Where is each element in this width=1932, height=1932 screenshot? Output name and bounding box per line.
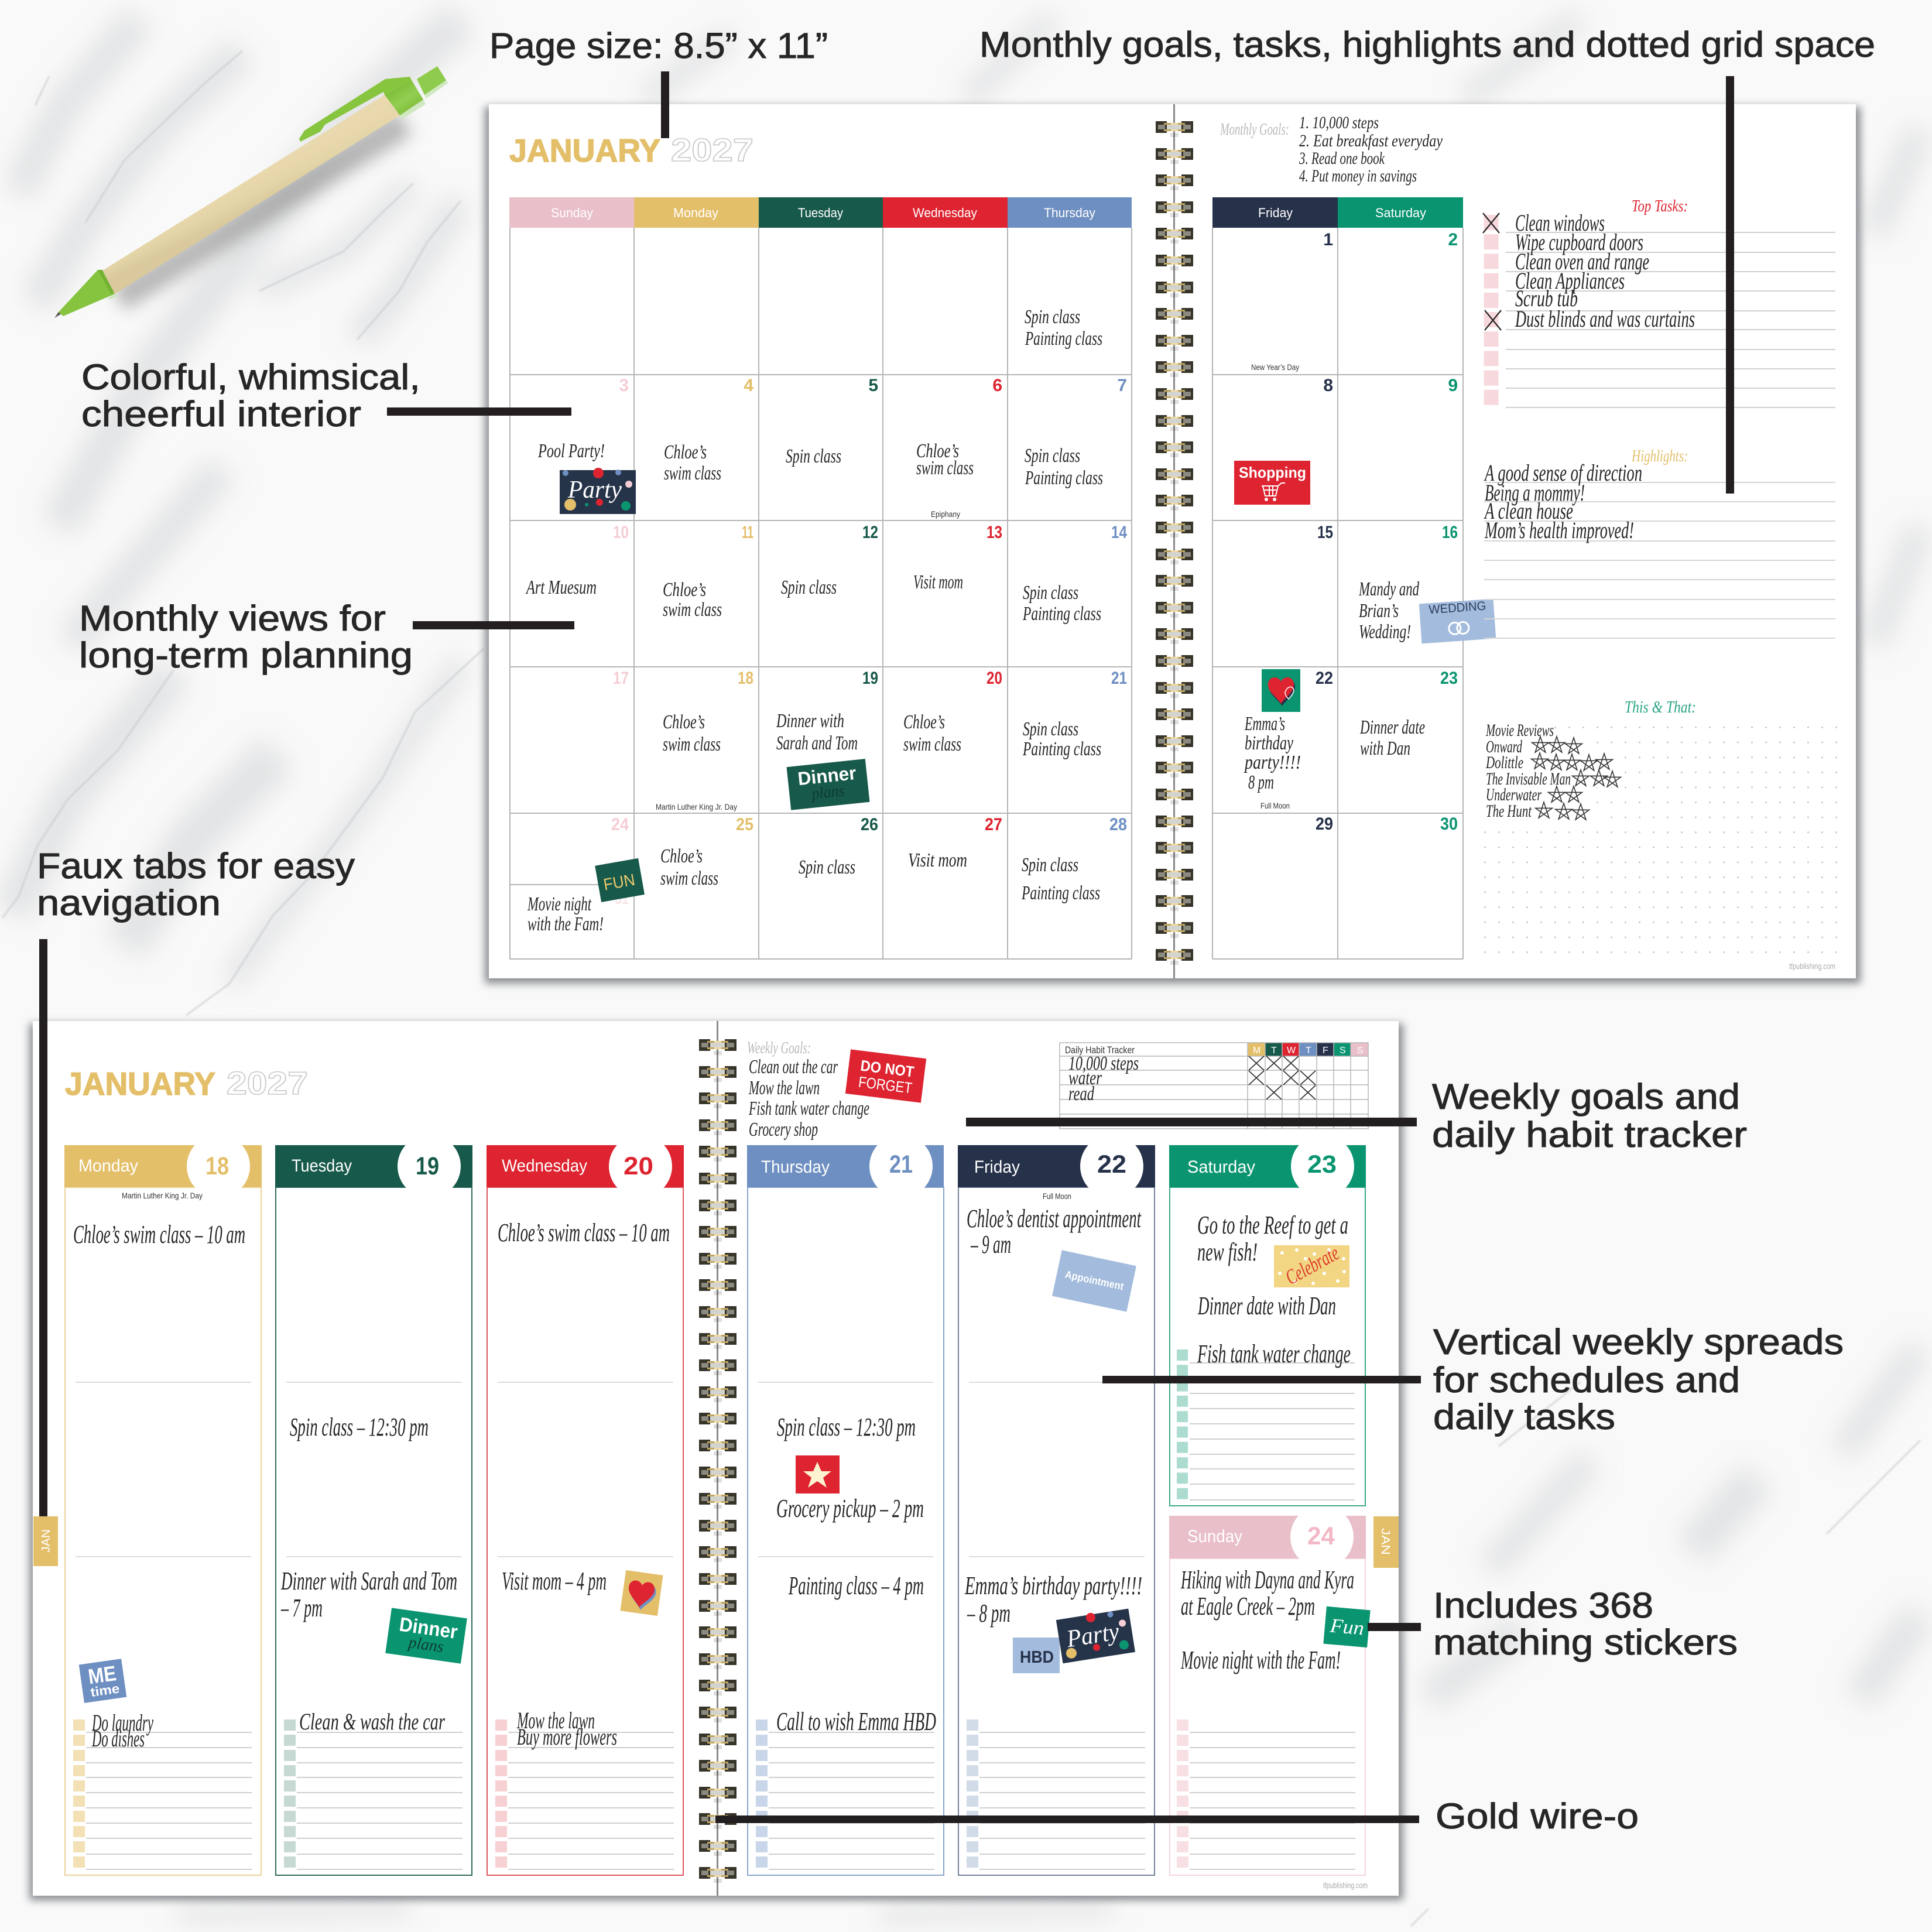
sticker: appointment: Appointment — [1064, 1269, 1125, 1292]
calendar date numbers: 23 — [1440, 669, 1458, 688]
day column: Saturday: new fish! — [1197, 1238, 1258, 1266]
gold wire-o binding, monthly spread — [1156, 121, 1193, 965]
calendar weekday headers: Saturday — [1375, 205, 1426, 220]
sticker: party: Party — [567, 477, 622, 503]
daily habit tracker: W — [1287, 1046, 1296, 1056]
sticker: dinner plans: Dinner — [797, 762, 857, 789]
top tasks list — [1483, 197, 1835, 408]
calendar handwritten entries: Painting class — [1022, 603, 1101, 625]
calendar date numbers: 21 — [1111, 669, 1127, 688]
calendar handwritten entries — [526, 306, 1425, 935]
daily habit tracker: water — [1068, 1067, 1102, 1089]
daily habit tracker: T — [1271, 1046, 1277, 1056]
month title — [509, 132, 753, 169]
sticker: me time: time — [90, 1681, 121, 1700]
highlights list: A good sense of direction — [1484, 460, 1642, 486]
calendar handwritten entries: birthday — [1245, 732, 1294, 754]
calendar handwritten entries: Spin class — [1025, 445, 1080, 467]
top tasks list: Clean Appliances — [1515, 268, 1625, 294]
calendar handwritten entries: Chloe’s — [663, 579, 706, 601]
highlights list: Highlights: — [1631, 447, 1688, 465]
calendar date numbers: 14 — [1111, 523, 1127, 542]
sticker: HBD — [1013, 1638, 1060, 1673]
calendar handwritten entries: Chloe’s — [663, 711, 705, 733]
day column: Sunday: Hiking with Dayna and Kyra — [1180, 1566, 1354, 1594]
daily habit tracker: S — [1357, 1046, 1364, 1056]
callout: matching stickers: Includes 368 — [1433, 1585, 1653, 1625]
sticker: do not forget: FORGET — [858, 1073, 913, 1097]
day column: Monday: Martin Luther King Jr. Day — [122, 1191, 203, 1200]
spine line — [717, 1021, 718, 1896]
daily habit tracker — [1060, 1043, 1368, 1129]
calendar handwritten entries: Dinner date — [1359, 717, 1425, 738]
sticker: wedding: WEDDING — [1429, 600, 1486, 616]
calendar date numbers: 8 — [1323, 376, 1333, 395]
sticker: party — [1056, 1607, 1135, 1663]
callout: faux tabs — [37, 846, 355, 1516]
callout: matching stickers: matching stickers — [1433, 1622, 1738, 1662]
calendar weekday headers: Sunday — [551, 205, 593, 220]
calendar handwritten entries: Chloe’s — [903, 711, 945, 733]
calendar weekday headers: Tuesday — [798, 205, 843, 220]
day column: Tuesday: Dinner with Sarah and Tom — [280, 1567, 457, 1595]
dotted grid: this and that — [1484, 698, 1838, 954]
callout: vertical weekly spreads: for schedules and — [1433, 1360, 1740, 1400]
top tasks list: Wipe cupboard doors — [1515, 229, 1643, 255]
calendar date numbers — [611, 230, 1458, 908]
calendar date numbers: 24 — [611, 815, 629, 834]
day column: Thursday: Painting class – 4 pm — [788, 1571, 924, 1600]
calendar handwritten entries: Wedding! — [1359, 621, 1411, 643]
calendar handwritten entries: Spin class — [781, 577, 837, 598]
callout: page size — [489, 26, 828, 138]
calendar handwritten entries: Sarah and Tom — [776, 732, 858, 754]
daily habit tracker: S — [1340, 1046, 1346, 1056]
dotted grid: this and that: Movie Reviews — [1485, 721, 1554, 740]
top tasks list: Clean oven and range — [1515, 248, 1649, 275]
calendar date numbers: 11 — [742, 523, 753, 542]
calendar handwritten entries: Spin class — [1023, 718, 1078, 740]
spine line — [1173, 104, 1175, 978]
day column: Monday: 18 — [205, 1152, 229, 1180]
top tasks list: Clean windows — [1515, 210, 1605, 236]
calendar handwritten entries: Visit mom — [908, 849, 967, 871]
calendar holiday captions: New Year’s Day — [1251, 362, 1299, 372]
day column: Monday: Do laundry — [91, 1710, 153, 1736]
day column: Monday: Chloe’s swim class – 10 am — [73, 1220, 245, 1249]
day column: Saturday: Fish tank water change — [1197, 1340, 1351, 1368]
calendar handwritten entries: Chloe’s — [664, 441, 707, 463]
highlights list: Being a mommy! — [1485, 479, 1585, 506]
weekly goals — [747, 1039, 869, 1140]
day column: Wednesday: Wednesday — [502, 1156, 587, 1176]
calendar handwritten entries: Pool Party! — [537, 440, 605, 462]
calendar handwritten entries: swim class — [663, 734, 721, 755]
day column: Friday: Friday — [974, 1157, 1020, 1177]
daily habit tracker: M — [1253, 1046, 1260, 1056]
highlights list: A clean house — [1484, 498, 1573, 524]
calendar date numbers: 27 — [985, 815, 1002, 834]
calendar date numbers: 7 — [1117, 376, 1127, 395]
faux tab: left JAN: JAN — [40, 1529, 53, 1553]
sticker: appointment — [1052, 1250, 1136, 1312]
calendar date numbers: 6 — [992, 376, 1002, 395]
calendar handwritten entries: Art Muesum — [526, 577, 597, 598]
calendar date numbers: 31 — [615, 889, 629, 908]
sticker: heart — [1262, 669, 1300, 712]
day column: Friday: – 8 pm — [967, 1599, 1010, 1628]
daily habit tracker: Daily Habit Tracker — [1065, 1044, 1135, 1056]
calendar holiday captions: Epiphany — [931, 509, 960, 519]
calendar date numbers: 9 — [1448, 376, 1458, 395]
calendar weekday headers — [509, 197, 1463, 228]
day column: Thursday — [747, 1135, 944, 1875]
dotted grid: this and that: Onward — [1486, 737, 1523, 756]
sticker: fun: Fun — [1328, 1615, 1365, 1639]
day column: Wednesday: Mow the lawn — [516, 1707, 595, 1734]
day column: Tuesday: Clean & wash the car — [299, 1708, 445, 1735]
sticker: shopping — [1234, 461, 1310, 505]
monthly goals — [1220, 113, 1443, 186]
sticker: me time — [79, 1659, 126, 1703]
callout: monthly views: long-term planning — [79, 635, 413, 675]
sticker: fun — [1323, 1606, 1371, 1647]
month title: 2027 — [671, 132, 753, 168]
calendar date numbers: 22 — [1316, 669, 1333, 688]
calendar handwritten entries: Spin class — [1022, 854, 1078, 876]
monthly goals: 1. 10,000 steps — [1299, 113, 1379, 132]
top tasks list: Dust blinds and was curtains — [1515, 306, 1695, 332]
daily habit tracker: T — [1306, 1046, 1311, 1056]
callout: colorful interior: Colorful, whimsical, — [81, 357, 420, 397]
weekly goals: Weekly Goals: — [747, 1039, 811, 1057]
calendar date numbers: 12 — [862, 523, 878, 542]
calendar handwritten entries: Visit mom — [913, 571, 963, 593]
calendar handwritten entries: Chloe’s — [916, 440, 959, 462]
day column: Wednesday: Buy more flowers — [517, 1724, 617, 1750]
day column: Tuesday: – 7 pm — [280, 1594, 323, 1622]
calendar handwritten entries: Spin class — [1025, 306, 1080, 328]
dotted grid: this and that: This & That: — [1625, 698, 1696, 717]
calendar handwritten entries: with Dan — [1360, 738, 1410, 759]
sticker: shopping: Shopping — [1239, 464, 1306, 481]
top tasks list: Scrub tub — [1515, 285, 1578, 311]
calendar date numbers: 19 — [862, 669, 878, 688]
faux tab: right JAN: JAN — [1379, 1528, 1392, 1555]
day column: Thursday: Thursday — [761, 1157, 830, 1177]
callout: gold wire-o — [715, 1796, 1639, 1836]
sticker: me time: ME — [87, 1661, 118, 1688]
calendar handwritten entries: Spin class — [1023, 582, 1078, 604]
day column: Saturday: Dinner date with Dan — [1197, 1292, 1336, 1320]
day column: Sunday: at Eagle Creek – 2pm — [1181, 1592, 1315, 1621]
calendar handwritten entries: Spin class — [786, 446, 841, 467]
day column: Tuesday: Spin class – 12:30 pm — [290, 1413, 429, 1441]
callout: gold wire-o: Gold wire-o — [1436, 1796, 1639, 1836]
day column: Thursday: Grocery pickup – 2 pm — [776, 1494, 924, 1523]
sticker: star — [796, 1455, 840, 1493]
week title: JANUARY — [65, 1066, 215, 1102]
icon: green and kraft paper pen — [54, 66, 448, 318]
calendar handwritten entries: Movie night — [527, 893, 592, 915]
calendar holiday captions — [656, 362, 1299, 811]
weekly goals: Grocery shop — [749, 1119, 818, 1140]
daily habit tracker: read — [1068, 1083, 1095, 1105]
calendar weekday headers: Friday — [1258, 205, 1293, 220]
day column: Wednesday: 20 — [624, 1152, 653, 1180]
callout: vertical weekly spreads — [1102, 1322, 1844, 1437]
callout: monthly views — [79, 598, 574, 675]
day column: Saturday: 23 — [1307, 1150, 1337, 1179]
sticker: wedding — [1419, 599, 1496, 643]
sticker: dinner plans: plans — [810, 782, 845, 803]
calendar date numbers: 20 — [986, 669, 1002, 688]
day column: Monday: Do dishes — [91, 1725, 145, 1752]
day column: Sunday: 24 — [1307, 1522, 1335, 1550]
day column: Saturday: Go to the Reef to get a — [1197, 1211, 1348, 1239]
callout: monthly views: Monthly views for — [79, 598, 386, 638]
publisher url: tfpublishing.com — [1789, 961, 1835, 971]
calendar handwritten entries: Dinner with — [776, 710, 844, 732]
monthly goals: 3. Read one book — [1299, 149, 1385, 168]
calendar handwritten entries: Painting class — [1025, 467, 1103, 489]
callout: colorful interior: cheerful interior — [81, 394, 361, 434]
day column: Sunday: Sunday — [1187, 1527, 1242, 1546]
month title: JANUARY — [509, 132, 660, 169]
callout: monthly goals and grid space — [979, 25, 1875, 494]
daily habit tracker: F — [1323, 1046, 1328, 1056]
day column: Tuesday: Tuesday — [292, 1156, 352, 1176]
calendar date numbers: 2 — [1448, 230, 1458, 249]
sticker: celebrate — [1274, 1241, 1349, 1289]
day column: Thursday: Spin class – 12:30 pm — [777, 1413, 916, 1441]
sticker: heart — [620, 1570, 663, 1616]
callout: monthly goals and grid space: Monthly goals, tasks, highlights and dotted grid space — [979, 25, 1875, 64]
callout: weekly goals and habit tracker — [966, 1077, 1747, 1155]
sticker: fun: FUN — [602, 871, 636, 894]
calendar date numbers: 29 — [1316, 814, 1333, 834]
sticker: dinner plans: Dinner — [398, 1614, 459, 1643]
calendar date numbers: 28 — [1109, 815, 1127, 834]
day column: Saturday: Saturday — [1187, 1157, 1255, 1177]
publisher url: tfpublishing.com — [1323, 1880, 1368, 1890]
week title: 2027 — [227, 1065, 308, 1101]
dotted grid: this and that: Underwater — [1486, 785, 1542, 804]
calendar weekday headers: Monday — [673, 205, 718, 220]
callout: faux tabs: Faux tabs for easy — [37, 846, 355, 886]
sticker: party — [560, 468, 636, 514]
calendar handwritten entries: Chloe’s — [660, 845, 703, 867]
sticker: celebrate: Celebrate — [1282, 1241, 1343, 1289]
day column: Tuesday — [275, 1135, 472, 1875]
calendar handwritten entries: swim class — [916, 457, 974, 479]
day column: Friday: – 9 am — [970, 1230, 1011, 1259]
calendar handwritten entries: Brian’s — [1359, 600, 1399, 622]
calendar weekday headers: Wednesday — [913, 205, 977, 220]
calendar date numbers: 10 — [613, 523, 629, 542]
dotted grid: this and that: The Invisable Man — [1486, 769, 1571, 789]
calendar date numbers: 5 — [868, 376, 878, 395]
calendar holiday captions: Full Moon — [1260, 801, 1290, 810]
monthly goals: 2. Eat breakfast everyday — [1299, 131, 1443, 150]
callout: weekly goals and habit tracker: Weekly goals and — [1432, 1077, 1740, 1116]
calendar handwritten entries: Painting class — [1021, 882, 1100, 904]
calendar handwritten entries: Painting class — [1025, 328, 1102, 350]
callout: vertical weekly spreads: daily tasks — [1433, 1397, 1615, 1437]
day column: Tuesday: 19 — [416, 1152, 439, 1180]
callout: weekly goals and habit tracker: daily habit tracker — [1432, 1115, 1747, 1155]
calendar handwritten entries: Painting class — [1022, 738, 1101, 760]
weekly goals: Mow the lawn — [748, 1077, 820, 1099]
day column: Saturday — [1169, 1135, 1366, 1506]
day column: Friday: 22 — [1097, 1150, 1126, 1179]
gold wire-o binding, weekly spread — [699, 1039, 737, 1883]
calendar date numbers: 1 — [1323, 230, 1333, 249]
dotted grid: this and that: The Hunt — [1486, 801, 1532, 821]
calendar handwritten entries: 8 pm — [1248, 772, 1274, 793]
calendar date numbers: 25 — [736, 815, 753, 834]
calendar date numbers: 26 — [861, 815, 878, 834]
calendar handwritten entries: swim class — [903, 734, 961, 755]
sticker: party: Party — [1064, 1618, 1121, 1653]
sticker: dinner plans — [385, 1608, 467, 1664]
calendar handwritten entries: swim class — [663, 599, 722, 621]
calendar holiday captions: Martin Luther King Jr. Day — [656, 802, 737, 811]
weekly goals: Clean out the car — [749, 1056, 838, 1078]
sticker: HBD: HBD — [1020, 1648, 1054, 1667]
week title — [65, 1065, 308, 1102]
calendar date numbers: 3 — [619, 376, 629, 395]
calendar date numbers: 4 — [744, 376, 753, 395]
highlights list: Mom’s health improved! — [1484, 517, 1634, 543]
day column: Friday — [958, 1135, 1155, 1875]
day column: Monday — [64, 1135, 262, 1875]
day column: Friday: Full Moon — [1043, 1191, 1071, 1201]
day column: Sunday: Movie night with the Fam! — [1180, 1646, 1341, 1674]
day column: Thursday: Call to wish Emma HBD — [776, 1707, 936, 1736]
callout: matching stickers — [1368, 1585, 1738, 1662]
day column: Monday: Monday — [78, 1156, 138, 1176]
calendar handwritten entries: with the Fam! — [527, 913, 604, 935]
calendar handwritten entries: Emma’s — [1244, 713, 1285, 735]
monthly goals: 4. Put money in savings — [1299, 166, 1417, 186]
sticker: fun — [595, 858, 645, 902]
day column: Wednesday: Visit mom – 4 pm — [502, 1567, 607, 1595]
day column: Friday: Chloe’s dentist appointment — [967, 1204, 1142, 1233]
highlights list — [1484, 447, 1835, 638]
top tasks list: Top Tasks: — [1632, 197, 1688, 215]
weekly goals: Fish tank water change — [748, 1098, 869, 1119]
faux tab: right JAN — [1373, 1516, 1399, 1568]
callout: page size: Page size: 8.5” x 11” — [489, 26, 828, 66]
day column: Wednesday: Chloe’s swim class – 10 am — [498, 1218, 670, 1247]
calendar date numbers: 16 — [1442, 523, 1458, 542]
calendar handwritten entries: Spin class — [799, 857, 855, 878]
callout: colorful interior — [81, 357, 571, 434]
day column: Wednesday — [487, 1135, 684, 1875]
sticker: do not forget — [845, 1049, 926, 1103]
calendar date numbers: 18 — [738, 669, 753, 688]
sticker: dinner plans: plans — [406, 1633, 445, 1656]
calendar date numbers: 13 — [986, 523, 1002, 542]
day column: Thursday: 21 — [889, 1150, 913, 1179]
faux tab: left JAN — [33, 1516, 58, 1566]
calendar handwritten entries: Mandy and — [1358, 578, 1420, 600]
calendar handwritten entries: party!!!! — [1244, 752, 1301, 773]
calendar weekday headers: Thursday — [1044, 205, 1095, 220]
panel: monthly spread — [489, 104, 1856, 978]
calendar date numbers: 30 — [1440, 814, 1458, 834]
callout: faux tabs: navigation — [37, 883, 221, 923]
daily habit tracker: 10,000 steps — [1068, 1053, 1139, 1074]
monthly goals: Monthly Goals: — [1220, 121, 1289, 139]
panel: weekly spread — [33, 1021, 1399, 1896]
dotted grid: this and that: Dolittle — [1485, 753, 1523, 772]
calendar date numbers: 17 — [613, 669, 629, 688]
sticker: dinner plans — [786, 759, 869, 810]
day column: Sunday — [1169, 1505, 1366, 1875]
sticker: do not forget: DO NOT — [859, 1057, 915, 1081]
day column: Friday: Emma’s birthday party!!!! — [964, 1571, 1142, 1600]
calendar handwritten entries: swim class — [664, 463, 721, 484]
calendar date numbers: 15 — [1317, 523, 1333, 542]
callout: vertical weekly spreads: Vertical weekly spreads — [1433, 1322, 1844, 1362]
calendar handwritten entries: swim class — [660, 868, 718, 889]
